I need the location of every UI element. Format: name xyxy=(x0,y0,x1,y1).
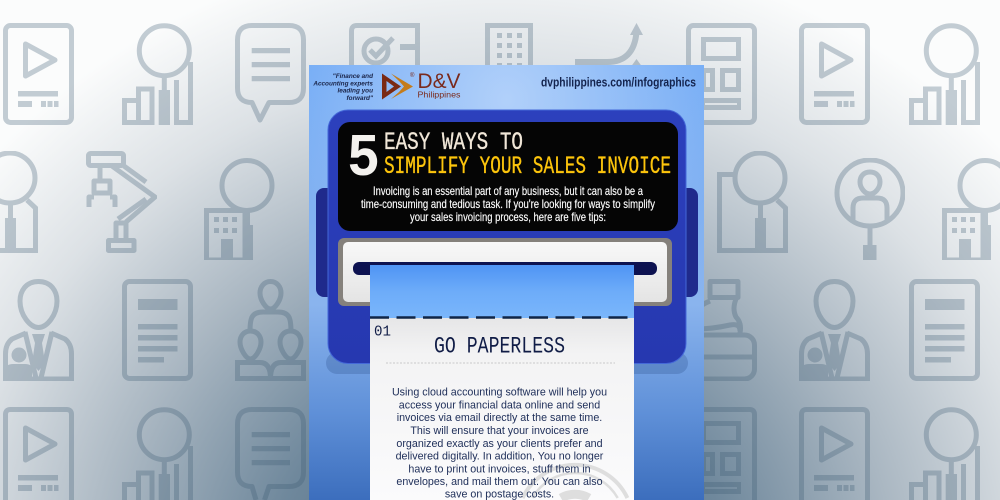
intro text: Invoicing is an essential part of any business, but it can also be a xyxy=(373,184,643,198)
intro text: your sales invoicing process, here are five tips: xyxy=(410,210,606,224)
icon: robot arm xyxy=(88,154,155,250)
step body text: Using cloud accounting software will help you xyxy=(392,386,607,398)
step body text xyxy=(392,386,607,500)
icon: layout document xyxy=(688,26,754,122)
icon: checklist document xyxy=(352,26,418,68)
icon: speech bubble xyxy=(238,26,304,120)
icon: magnifier over document left xyxy=(0,153,36,252)
step body text: This will ensure that your invoices are xyxy=(410,425,589,437)
icon: magnifier over building xyxy=(206,160,272,260)
icon: magnifier over document right xyxy=(720,153,786,252)
icon: layout document bottom xyxy=(688,410,754,500)
step body text: invoices via email directly at the same time. xyxy=(397,412,602,424)
title line 2: SIMPLIFY YOUR SALES INVOICE xyxy=(384,152,671,181)
title line 1: EASY WAYS TO xyxy=(384,128,523,157)
step heading: GO PAPERLESS xyxy=(434,334,565,360)
icon: text document right xyxy=(912,282,978,378)
icon: magnifier over person xyxy=(837,160,903,260)
icon: reading group xyxy=(238,282,304,378)
panel: infographic xyxy=(309,65,704,500)
icon: video tablet right xyxy=(802,26,868,122)
logo: D&V xyxy=(418,70,460,93)
display screen xyxy=(338,122,678,231)
machine shadow xyxy=(326,352,688,374)
website url: dvphilippines.com/infographics xyxy=(541,76,696,90)
icon: businessman right xyxy=(802,282,868,381)
step body text: access your financial data online and send xyxy=(399,399,600,411)
receipt paper xyxy=(370,265,634,500)
icon: growth arrow xyxy=(575,23,643,68)
big number five: 5 xyxy=(347,126,380,194)
step number: 01 xyxy=(374,324,391,340)
icon: video tablet bottom xyxy=(6,410,72,500)
logo xyxy=(382,70,460,100)
printer slot xyxy=(338,238,672,306)
logo: Philippines xyxy=(418,90,460,100)
icon: video tablet xyxy=(6,26,72,122)
intro text: time-consuming and tedious task. If you're looking for ways to simplify xyxy=(361,197,655,211)
icon: magnifier chart bottom right xyxy=(912,410,978,500)
header tagline: Accounting experts xyxy=(312,80,373,87)
intro text xyxy=(361,184,655,224)
logo: ® xyxy=(410,72,415,79)
header tagline: leading you xyxy=(337,88,373,95)
icon: magnifier over bar chart xyxy=(124,26,190,125)
icon: office building xyxy=(488,26,530,68)
heading divider xyxy=(386,362,615,364)
icon: magnifier chart bottom xyxy=(124,410,190,500)
icon: magnifier over building right xyxy=(944,160,1000,260)
step body text: have to print out invoices, stuff them in xyxy=(408,463,591,475)
machine side ears xyxy=(316,188,698,297)
icon: hand over box xyxy=(688,282,754,379)
icon: text document xyxy=(124,282,190,378)
step body text: organized exactly as your clients prefer and xyxy=(396,438,603,450)
perforation line xyxy=(370,316,634,319)
header tagline: forward" xyxy=(347,95,374,102)
header tagline: "Finance and xyxy=(333,73,374,80)
watermark rings xyxy=(523,465,627,498)
icon: speech bubble bottom xyxy=(238,410,304,500)
icon: video tablet bottom right xyxy=(802,410,868,500)
step body text: envelopes, and mail them out. You can also xyxy=(396,476,603,488)
icon: businessman xyxy=(6,282,72,381)
icon: magnifier over bar chart right xyxy=(912,26,978,125)
header tagline xyxy=(312,73,374,102)
step body text: delivered digitally. In addition, You no longer xyxy=(396,451,604,463)
machine body xyxy=(328,110,686,364)
